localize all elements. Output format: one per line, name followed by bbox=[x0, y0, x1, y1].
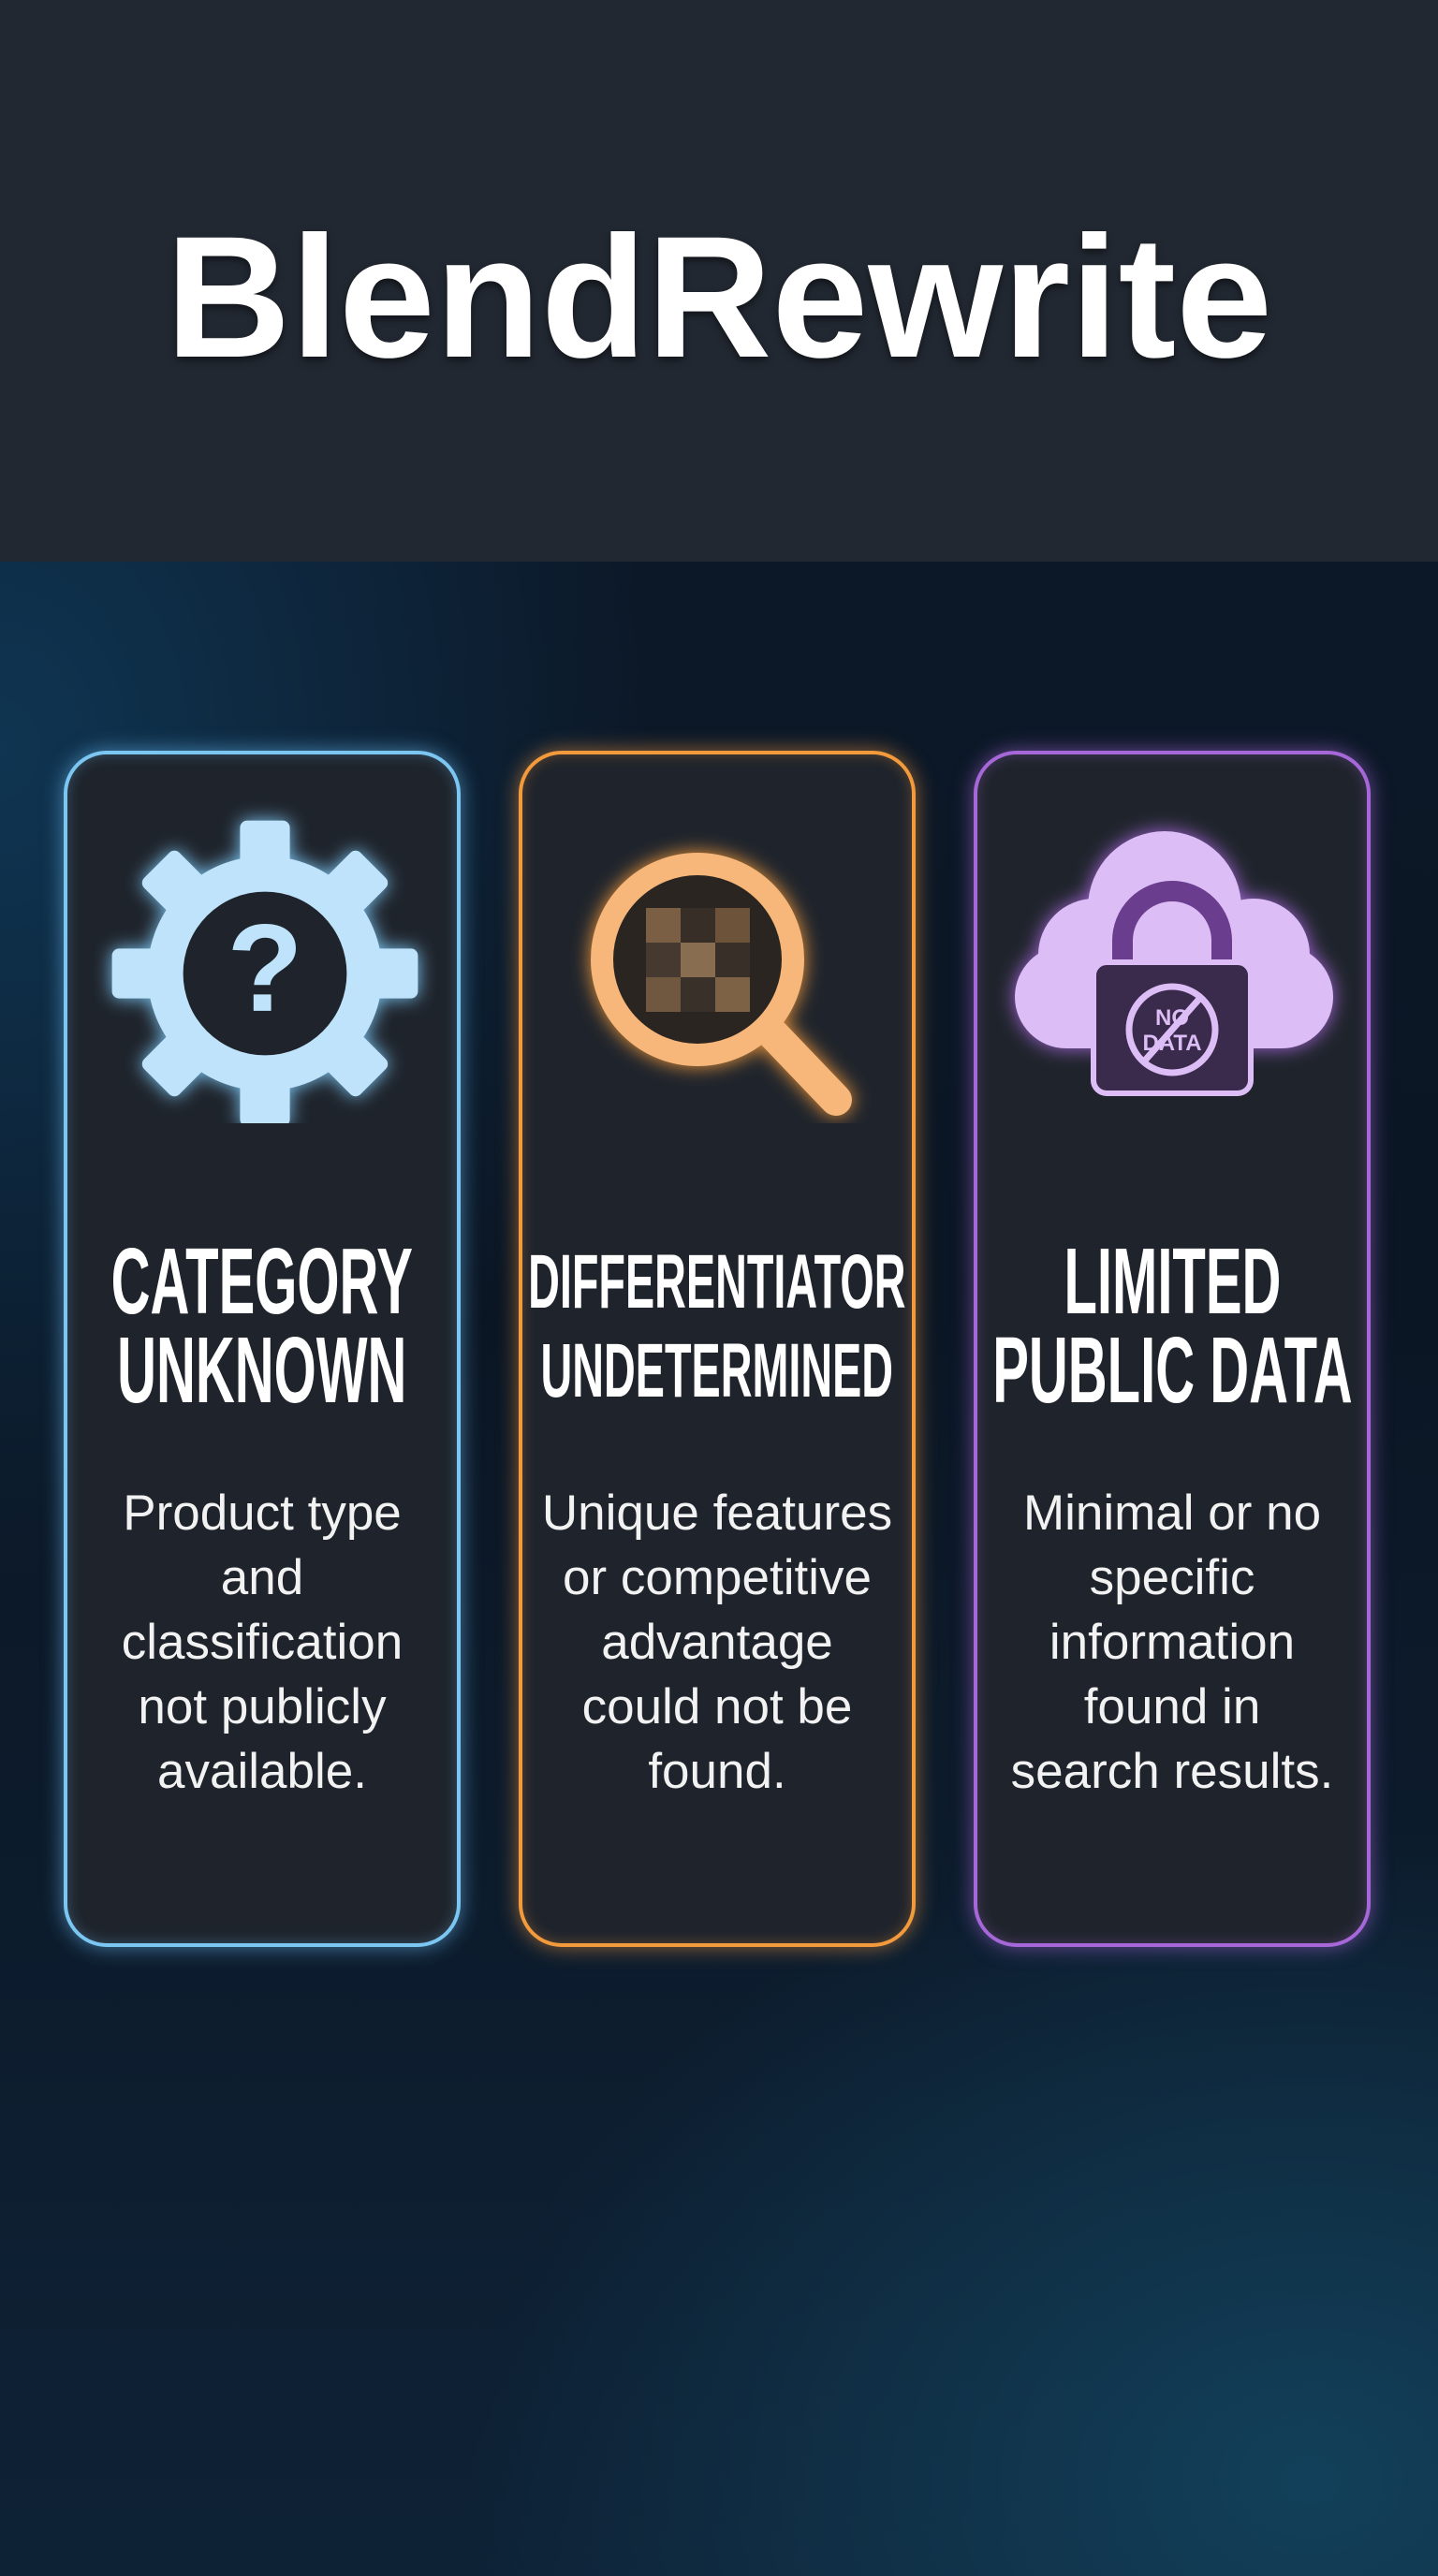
heading bbox=[992, 1229, 1352, 1423]
icon: cloud with lock and no data: NO bbox=[1155, 1005, 1189, 1031]
icon: gear with question mark bbox=[97, 807, 433, 1123]
description: found. bbox=[648, 1744, 786, 1799]
panel: differentiator undetermined bbox=[519, 751, 916, 1947]
description bbox=[1011, 1486, 1333, 1799]
description bbox=[542, 1486, 892, 1799]
description: and bbox=[221, 1550, 303, 1605]
description: Unique features bbox=[542, 1486, 892, 1541]
heading bbox=[528, 1239, 906, 1413]
icon: cloud with lock and no data: DATA bbox=[1142, 1031, 1202, 1056]
description: advantage bbox=[601, 1615, 833, 1670]
description: specific bbox=[1090, 1550, 1255, 1605]
heading: LIMITED bbox=[1064, 1229, 1281, 1334]
heading bbox=[111, 1229, 413, 1423]
icon: gear with question mark: ? bbox=[227, 900, 303, 1038]
heading: CATEGORY bbox=[111, 1229, 413, 1334]
header band bbox=[0, 0, 1438, 562]
description: available. bbox=[157, 1744, 367, 1799]
description: could not be bbox=[582, 1679, 852, 1734]
description bbox=[122, 1486, 403, 1799]
description: search results. bbox=[1011, 1744, 1333, 1799]
icon: cloud with lock and no data bbox=[1001, 817, 1347, 1096]
panel: category unknown bbox=[64, 751, 461, 1947]
icon: magnifier with pixelated content bbox=[576, 838, 865, 1123]
description: Product type bbox=[123, 1486, 402, 1541]
heading: UNKNOWN bbox=[117, 1318, 407, 1423]
description: classification bbox=[122, 1615, 403, 1670]
description: Minimal or no bbox=[1023, 1486, 1321, 1541]
description: information bbox=[1049, 1615, 1295, 1670]
title: BlendRewrite bbox=[166, 201, 1272, 394]
heading: DIFFERENTIATOR bbox=[528, 1239, 906, 1325]
description: found in bbox=[1084, 1679, 1260, 1734]
heading: UNDETERMINED bbox=[541, 1328, 893, 1413]
description: not publicly bbox=[138, 1679, 387, 1734]
heading: PUBLIC DATA bbox=[992, 1318, 1352, 1423]
description: or competitive bbox=[563, 1550, 872, 1605]
panel: limited public data bbox=[974, 751, 1371, 1947]
